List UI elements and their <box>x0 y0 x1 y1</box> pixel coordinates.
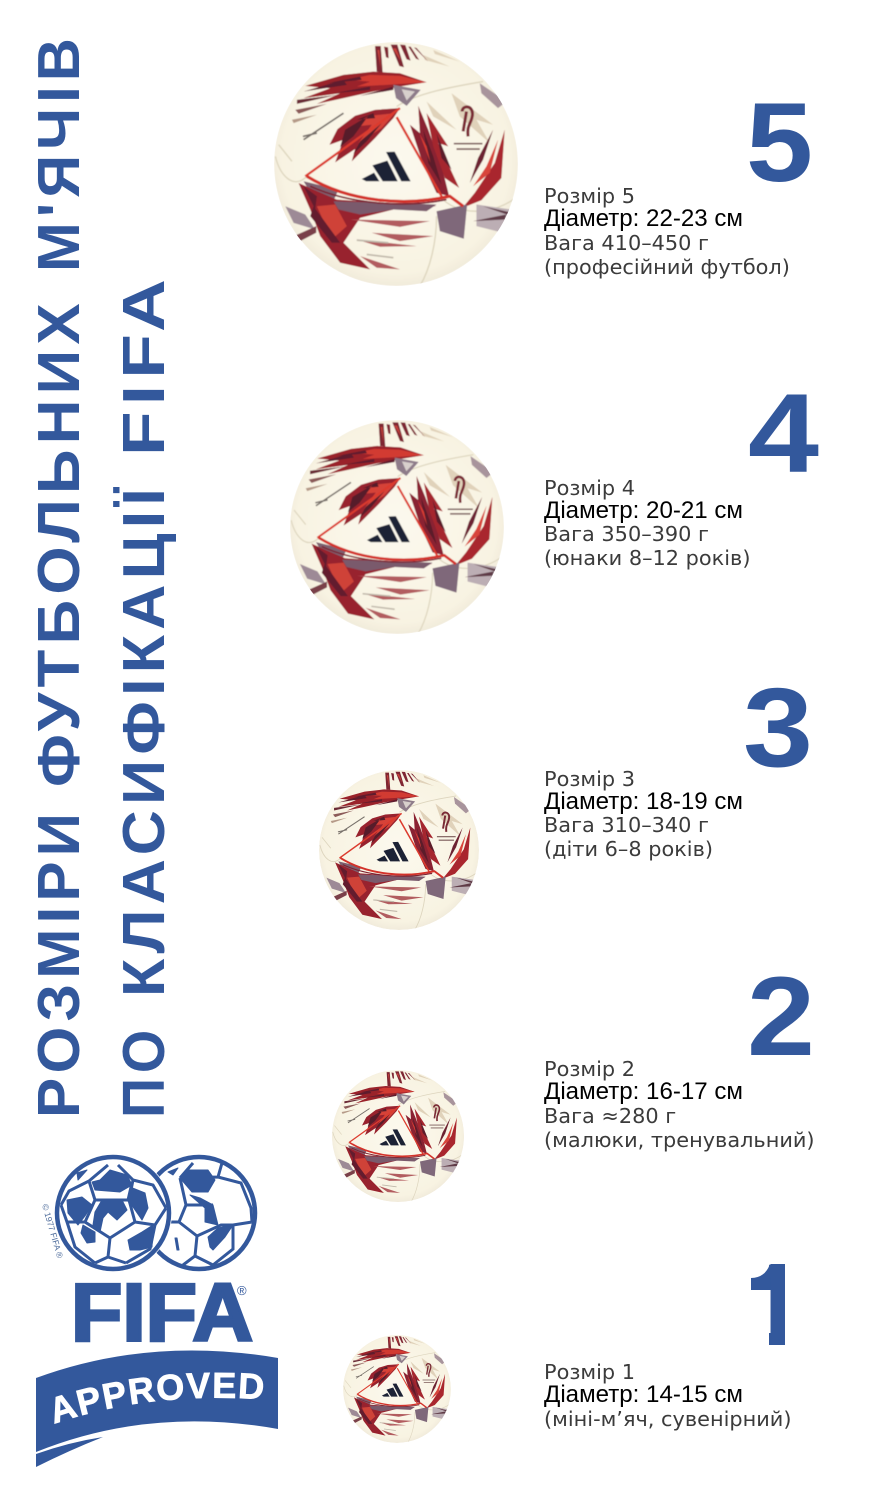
title: РОЗМІРИ <box>26 808 92 1118</box>
info: size 4: (юнаки 8–12 років) <box>544 546 750 570</box>
info: size 5: Розмір 5 <box>544 184 635 208</box>
info: size 4: Діаметр: 20-21 см <box>544 497 743 524</box>
number 1: 1 <box>743 1239 809 1371</box>
number 5: 5 <box>746 80 813 205</box>
registered mark: ® <box>237 1283 247 1298</box>
info: size 3 <box>544 767 743 861</box>
icon: left globe football <box>54 1154 172 1272</box>
banner <box>36 1350 278 1452</box>
number 3: 3 <box>743 665 813 790</box>
FIFA approved logo <box>36 1154 278 1467</box>
info: size 2 <box>544 1057 815 1152</box>
number 2: 2 <box>747 954 815 1079</box>
FIFA wordmark: FIFA <box>71 1268 253 1358</box>
number 4: 4 <box>748 371 819 496</box>
ball: size 2 <box>332 1070 464 1202</box>
info: size 1: Розмір 1 <box>544 1360 635 1384</box>
info: size 5: Діаметр: 22-23 см <box>544 205 743 232</box>
info: size 4: Розмір 4 <box>544 476 635 500</box>
info: size 3: Розмір 3 <box>544 767 635 791</box>
title: ФУТБОЛЬНИХ <box>26 298 92 787</box>
approved text: APPROVED <box>54 1372 264 1424</box>
title: ПО <box>111 1025 177 1118</box>
banner swoosh <box>36 1437 103 1467</box>
copyright text: © 1977 FIFA ® <box>40 1203 65 1260</box>
info: size 3: (діти 6–8 років) <box>544 837 713 861</box>
ball: size 3 <box>319 770 479 930</box>
info: size 1 <box>544 1360 791 1431</box>
info: size 1: (міні-м’яч, сувенірний) <box>544 1407 791 1431</box>
info: size 5: Вага 410–450 г <box>544 231 709 255</box>
ball: size 1 <box>343 1335 451 1443</box>
icon: right globe football <box>143 1157 255 1269</box>
info: size 4 <box>544 476 750 570</box>
title <box>26 33 177 1118</box>
info: size 2: Діаметр: 16-17 см <box>544 1078 743 1105</box>
info: size 2: Вага ≈280 г <box>544 1104 676 1128</box>
info: size 2: (малюки, тренувальний) <box>544 1128 815 1152</box>
ball: size 5 <box>274 42 518 286</box>
title: М'ЯЧІВ <box>26 33 92 272</box>
info: size 1: Діаметр: 14-15 см <box>544 1381 743 1408</box>
info: size 5 <box>544 184 790 279</box>
title: FIFA <box>111 273 177 456</box>
info: size 3: Вага 310–340 г <box>544 813 709 837</box>
title: КЛАСИФІКАЦІЇ <box>111 483 177 997</box>
info: size 2: Розмір 2 <box>544 1057 635 1081</box>
info: size 4: Вага 350–390 г <box>544 522 709 546</box>
ball: size 4 <box>290 420 504 634</box>
info: size 5: (професійний футбол) <box>544 255 790 279</box>
number 1 <box>751 1264 785 1345</box>
info: size 3: Діаметр: 18-19 см <box>544 788 743 815</box>
